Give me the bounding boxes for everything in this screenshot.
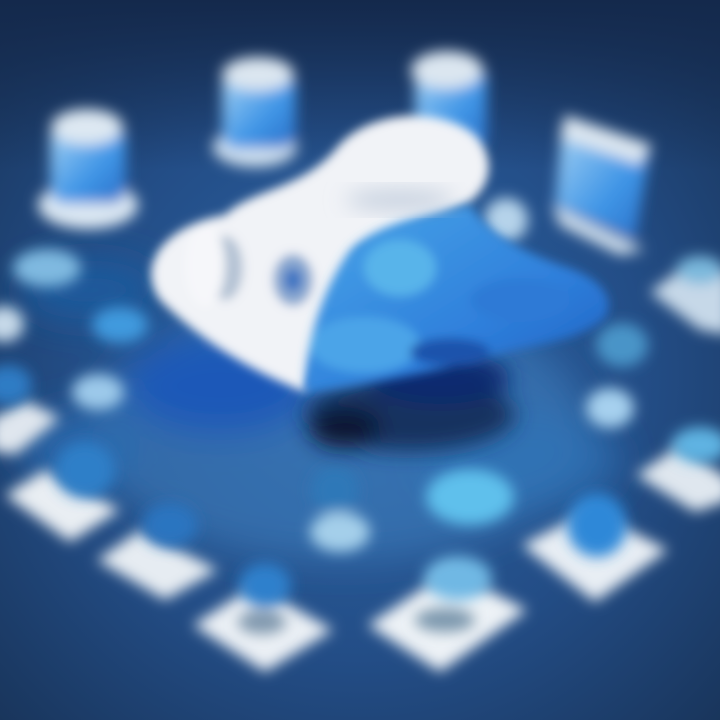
nodes: right side: [484, 198, 648, 428]
server: top right: [552, 115, 652, 255]
cloud: blue face: [305, 205, 609, 392]
cloud: shaded highlight: [345, 190, 455, 210]
devices: bottom row: [0, 400, 720, 672]
server: top left: [38, 109, 138, 229]
server: top centre right: [411, 51, 487, 150]
cloud shadow: [305, 352, 515, 451]
cloud: white body: [151, 116, 489, 392]
server: top centre left: [213, 57, 297, 167]
device: far right: [650, 256, 720, 335]
device screens: bottom row: [0, 365, 720, 634]
cloud: [151, 116, 609, 392]
network disc glow: [20, 260, 620, 560]
nodes: lower centre: [310, 466, 514, 552]
nodes: left side: [0, 249, 148, 410]
